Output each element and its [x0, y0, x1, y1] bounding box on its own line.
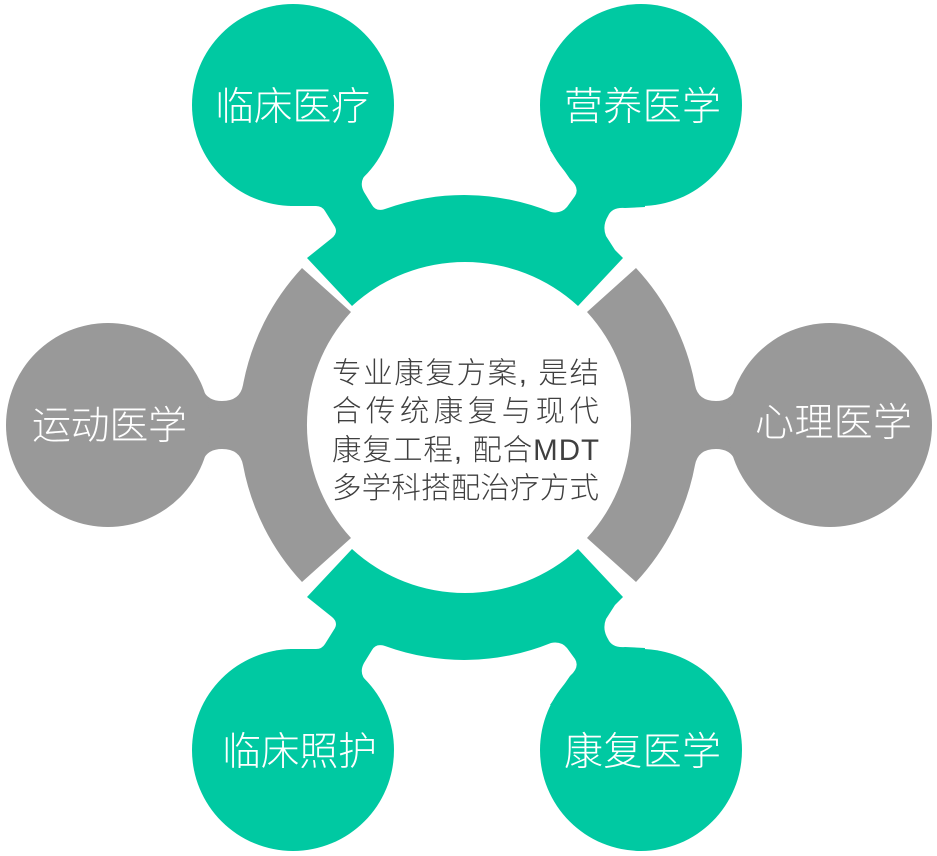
node: 临床医疗: 临床医疗 [215, 86, 370, 129]
center description text [332, 357, 599, 505]
bottom connector arc: green [290, 549, 645, 705]
node: 临床医疗 [192, 4, 394, 206]
node: 临床照护 [192, 649, 394, 851]
node: 康复医学: 康复医学 [564, 731, 721, 774]
center description text: 多学科搭配治疗方式 [332, 472, 599, 505]
node: 心理医学 [728, 323, 932, 527]
right connector arc: gray [587, 268, 788, 582]
center description text: 合传统康复与现代 [332, 395, 599, 428]
center description text: 专业康复方案, 是结 [332, 357, 599, 390]
node: 运动医学 [6, 323, 210, 527]
center description text: 康复工程, 配合MDT [332, 434, 599, 467]
node: 营养医学: 营养医学 [564, 86, 721, 129]
node: 运动医学: 运动医学 [32, 405, 187, 448]
top connector arc: green [290, 150, 645, 306]
left connector arc: gray [150, 268, 351, 582]
node: 营养医学 [540, 4, 742, 206]
node: 临床照护: 临床照护 [222, 731, 377, 774]
node: 康复医学 [540, 649, 742, 851]
node: 心理医学: 心理医学 [755, 402, 912, 445]
